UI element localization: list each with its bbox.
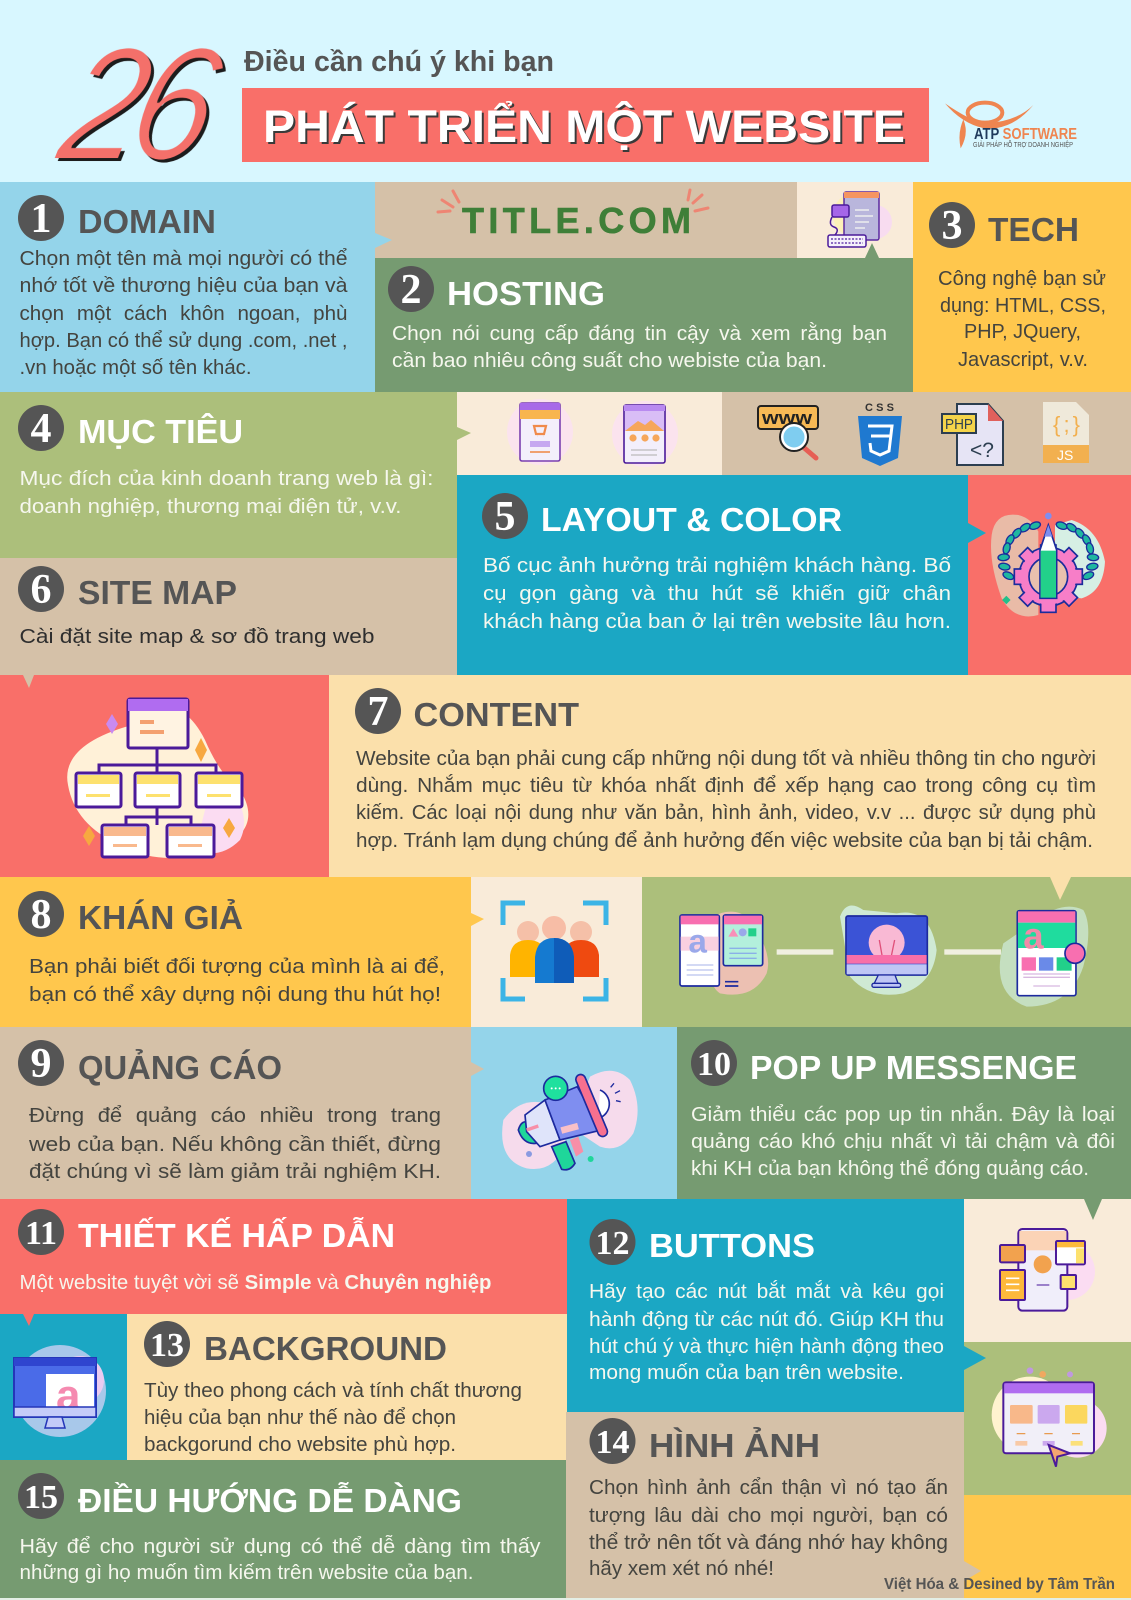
heading layout: LAYOUT & COLOR <box>541 501 842 538</box>
text quang cao: đặt chúng vì sẽ làm giảm trải nghiệm KH. <box>29 1160 441 1183</box>
heading domain: DOMAIN <box>78 203 216 240</box>
text hosting <box>392 322 887 372</box>
badge 14 <box>590 1418 636 1464</box>
icon: www search: www <box>761 408 813 428</box>
badge 13: 13 <box>150 1327 184 1364</box>
logo: ATP Software <box>945 103 1077 149</box>
panel 9: quang cao <box>0 1027 471 1199</box>
badge 11 <box>18 1209 64 1255</box>
text tech: Javascript, v.v. <box>958 348 1088 371</box>
panel 6: site map <box>0 558 457 675</box>
text quang cao <box>28 1104 441 1183</box>
text muc tieu: Mục đích của kinh doanh trang web là gì: <box>20 467 434 490</box>
badge 10: 10 <box>697 1046 731 1083</box>
text khan gia <box>29 955 445 1006</box>
badge 3 <box>929 202 975 249</box>
heading hinh anh: HÌNH ẢNH <box>649 1427 820 1464</box>
text hosting: Chọn nói cung cấp đáng tin cậy và xem rằng bạn <box>392 322 887 345</box>
panel 8: khan gia <box>0 877 471 1027</box>
text dieu huong: những gì họ muốn tìm kiếm trên website của bạn. <box>20 1561 474 1584</box>
badge 11: 11 <box>25 1215 57 1252</box>
icon: tablet with bubble <box>1000 907 1088 1007</box>
text layout: cụ gọn gàng và thu hút sẽ khiến giữ chân <box>483 582 951 605</box>
text quang cao: web của bạn. Nếu không cần thiết, đừng <box>28 1133 441 1156</box>
big number 26: 26 <box>48 17 240 196</box>
heading quang cao: QUẢNG CÁO <box>78 1049 282 1086</box>
badge 8 <box>18 891 64 938</box>
text dieu huong: Hãy để cho người sử dụng có thể dễ dàng tìm thấy <box>20 1535 541 1558</box>
text buttons: Hãy tạo các nút bắt mắt và kêu gọi <box>589 1280 944 1303</box>
icon: js <box>1043 402 1089 463</box>
panel 13: background <box>127 1314 567 1460</box>
icon: tablet with bubble: a <box>1023 916 1044 957</box>
title banner: PHÁT TRIỂN MỘT WEBSITE <box>263 101 905 152</box>
text hinh anh: tượng lâu dài cho mọi người, bạn có <box>589 1504 948 1527</box>
text site map: Cài đặt site map & sơ đồ trang web <box>20 625 374 648</box>
text hosting: cần bao nhiêu công suất cho webiste của bạn. <box>392 349 827 372</box>
heading khan gia: KHÁN GIẢ <box>78 899 243 936</box>
heading dieu huong: ĐIỀU HƯỚNG DỄ DÀNG <box>78 1482 462 1519</box>
arrow: khan gia to icon <box>471 913 484 926</box>
arrow: domain to title <box>375 233 392 248</box>
text quang cao: Đừng để quảng cáo nhiều trong trang <box>29 1104 441 1127</box>
text muc tieu <box>20 467 434 518</box>
panel 5: layout and color <box>457 475 968 675</box>
text layout <box>483 554 951 633</box>
text muc tieu: doanh nghiệp, thương mại điện tử, v.v. <box>20 495 402 518</box>
text pop up <box>691 1103 1115 1180</box>
badge 15: 15 <box>24 1479 58 1516</box>
text layout: Bố cục ảnh hưởng trải nghiệm khách hàng. Bố <box>483 554 951 577</box>
panel 1: domain <box>0 182 375 392</box>
text tech: dụng: HTML, CSS, <box>940 294 1106 317</box>
heading background: BACKGROUND <box>204 1330 447 1367</box>
connector <box>777 949 833 955</box>
heading site map: SITE MAP <box>78 574 237 611</box>
text domain <box>20 247 348 379</box>
icon: php <box>942 404 1003 465</box>
text background: hiệu của bạn như thế nào để chọn <box>144 1406 456 1429</box>
icon: php: <? <box>970 439 994 462</box>
heading thiet ke: THIẾT KẾ HẤP DẪN <box>78 1217 395 1254</box>
panel 11: thiet ke <box>0 1199 567 1314</box>
panel 12: buttons <box>567 1199 964 1412</box>
text background <box>144 1379 522 1456</box>
badge 10 <box>691 1040 737 1086</box>
text tech <box>938 267 1106 371</box>
text hinh anh <box>589 1476 948 1580</box>
sparkle rays <box>438 190 708 212</box>
panel 7: content <box>329 675 1131 877</box>
badge 1 <box>18 195 64 242</box>
text buttons: hút chú ý và thực hiện hành động theo <box>589 1335 944 1358</box>
big number 26: 26 <box>45 14 237 193</box>
badge 5: 5 <box>494 494 516 540</box>
text content: hợp. Tránh lạm dụng chúng để ảnh hưởng đến việc website của bạn bị tải chậm. <box>356 829 1093 852</box>
arrow: content down <box>1050 877 1071 900</box>
text tech: PHP, JQuery, <box>964 320 1081 343</box>
panel 14: hinh anh <box>566 1412 964 1600</box>
badge 1: 1 <box>30 196 52 242</box>
icon tile: shop phones <box>457 392 722 475</box>
logo: ATP Software: ATP SOFTWARE <box>974 126 1077 143</box>
text buttons <box>589 1280 944 1384</box>
arrow: hosting to tile <box>865 243 879 258</box>
text domain: Chọn một tên mà mọi người có thể <box>20 247 348 270</box>
icon tile: tech logos <box>722 392 1131 475</box>
panel: sitemap icon <box>0 675 329 877</box>
arrow: buttons to window <box>964 1346 986 1370</box>
panel 10: pop up <box>677 1027 1131 1199</box>
text domain: hợp. Bạn có thể sử dụng .com, .net , <box>20 329 348 352</box>
arrow: site map down <box>23 675 34 688</box>
badge 4 <box>18 405 64 452</box>
badge 7 <box>355 688 401 735</box>
panel: title.com banner <box>375 182 797 258</box>
text khan gia: bạn có thể xây dựng nội dung thu hút họ! <box>29 983 441 1006</box>
header <box>45 14 1077 196</box>
title banner <box>242 88 929 162</box>
arrow: thiet ke down <box>23 1314 34 1326</box>
text layout: khách hàng của ban ở lại trên website lâu hơn. <box>483 610 951 633</box>
text hinh anh: hãy xem xét nó nhé! <box>589 1557 774 1580</box>
heading hosting: HOSTING <box>447 275 605 312</box>
badge 14: 14 <box>596 1424 630 1461</box>
text content <box>356 747 1096 852</box>
text dieu huong <box>20 1535 541 1584</box>
badge 3: 3 <box>942 203 962 249</box>
text pop up: khi KH của bạn không thể đóng quảng cáo. <box>691 1157 1089 1180</box>
badge 7: 7 <box>368 689 388 735</box>
heading content: CONTENT <box>414 696 579 733</box>
text buttons: hành động từ các nút đó. Giúp KH thu <box>589 1308 944 1331</box>
title.com text: TITLE.COM <box>462 200 691 241</box>
arrow: pop up down <box>1084 1199 1102 1220</box>
icon: monitor bulb <box>840 905 937 995</box>
badge 12 <box>590 1219 636 1265</box>
text hinh anh: thể trở nên tốt và đáng nhớ hay không <box>589 1531 948 1554</box>
icon: css <box>858 402 902 466</box>
text khan gia: Bạn phải biết đối tượng của mình là ai để, <box>29 955 445 978</box>
panel 15: dieu huong <box>0 1460 566 1600</box>
heading buttons: BUTTONS <box>649 1227 815 1264</box>
panel: device icons <box>642 877 1131 1027</box>
text background: Tùy theo phong cách và tính chất thương <box>144 1379 522 1402</box>
subtitle: Điều cần chú ý khi bạn <box>244 46 554 78</box>
text domain: .vn hoặc một số tên khác. <box>20 356 252 379</box>
icon: js: {;} <box>1053 412 1080 437</box>
panel: monitor icon: a <box>56 1371 81 1420</box>
panel: gear pencil icon <box>968 475 1131 675</box>
badge 6 <box>18 566 64 613</box>
logo: ATP Software: GIẢI PHÁP HỖ TRỢ DOANH NGHIỆP <box>973 140 1073 149</box>
panel 3: tech <box>913 182 1131 392</box>
text content: Website của bạn phải cung cấp những nội dung tốt và nhiều thông tin cho người <box>356 747 1096 770</box>
badge 5 <box>482 493 528 540</box>
title banner: PHÁT TRIỂN MỘT WEBSITE <box>265 103 907 154</box>
icon tile: mobile app <box>964 1199 1131 1342</box>
badge 13 <box>144 1321 190 1367</box>
badge 4: 4 <box>30 406 52 452</box>
text pop up: Giảm thiểu các pop up tin nhắn. Đây là loại <box>691 1103 1115 1126</box>
arrow: hinh anh to corner <box>964 1561 981 1581</box>
panel: monitor icon <box>0 1314 127 1460</box>
arrow: quang cao to icon <box>471 1062 484 1076</box>
credit: Việt Hóa & Desined by Tâm Trần <box>884 1576 1115 1593</box>
panel 2: hosting <box>375 243 913 392</box>
badge 2 <box>388 266 434 313</box>
badge 9 <box>18 1040 64 1087</box>
badge 2: 2 <box>400 267 422 313</box>
heading pop up: POP UP MESSENGE <box>750 1049 1077 1086</box>
icon: js: JS <box>1057 447 1073 463</box>
badge 9: 9 <box>30 1041 52 1087</box>
text hinh anh: Chọn hình ảnh cẩn thận vì nó tạo ấn <box>589 1476 948 1499</box>
arrow: layout to gear <box>968 523 986 543</box>
panel 4: muc tieu <box>0 392 457 558</box>
yellow corner block <box>964 1495 1131 1600</box>
text domain: nhớ tốt về thương hiệu của bạn và <box>20 274 348 297</box>
icon tile: audience <box>471 877 642 1027</box>
icon tile: web window <box>964 1342 1131 1495</box>
text background: backgorund cho website phù hợp. <box>144 1433 456 1456</box>
heading muc tieu: MỤC TIÊU <box>78 413 243 450</box>
panel: megaphone icon <box>471 1027 677 1199</box>
text content: dùng. Nhắm mục tiêu từ khóa nhất định để xếp hạng cao trong công cụ tìm <box>356 774 1096 797</box>
text content: kiếm. Các loại nội dung như văn bản, hình ảnh, video, v.v ... được sử dụng phù <box>356 801 1096 824</box>
text domain: chọn một cách khôn ngoan, phù <box>20 302 347 325</box>
arrow: muc tieu to icons <box>457 427 471 440</box>
icon: css: CSS <box>865 402 894 414</box>
icon: dual tablets <box>680 912 768 995</box>
connector <box>944 949 1001 955</box>
text buttons: mong muốn của bạn trên website. <box>589 1361 904 1384</box>
badge 12: 12 <box>596 1225 630 1262</box>
text tech: Công nghệ bạn sử <box>938 267 1106 290</box>
text thiet ke: Một website tuyệt vời sẽ Simple và Chuyên nghiệp <box>20 1271 492 1294</box>
icon: dual tablets: a <box>688 924 707 961</box>
text pop up: quảng cáo khó chịu nhất vì tải chậm và đôi <box>691 1130 1115 1153</box>
icon: php: PHP <box>945 416 973 433</box>
badge 15 <box>18 1473 64 1519</box>
icon tile: code window <box>797 182 913 258</box>
badge 8: 8 <box>30 892 52 938</box>
heading tech: TECH <box>988 211 1079 248</box>
badge 6: 6 <box>30 567 52 613</box>
icon: www search <box>758 406 818 458</box>
